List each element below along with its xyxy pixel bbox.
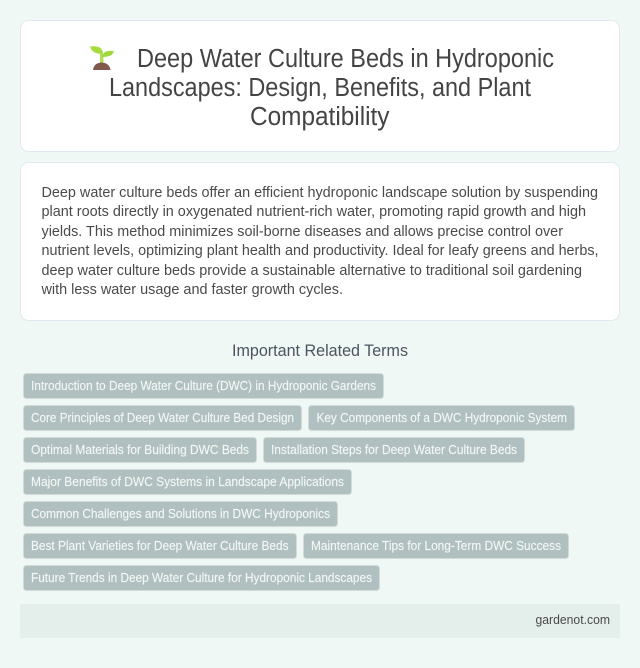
tag: installation steps bbox=[264, 438, 524, 462]
tag: maintenance tips bbox=[304, 534, 568, 558]
tag: major benefits: Major Benefits of DWC Systems in Landscape Applications bbox=[31, 474, 344, 489]
panel: title card bbox=[20, 20, 620, 152]
tag: future trends: Future Trends in Deep Water Culture for Hydroponic Landscapes bbox=[31, 570, 372, 585]
tag: maintenance tips: Maintenance Tips for Long-Term DWC Success bbox=[311, 538, 561, 553]
tag: major benefits bbox=[24, 470, 352, 494]
description text: with less water usage and faster growth cycles. bbox=[41, 282, 343, 298]
tag: future trends bbox=[24, 566, 380, 590]
footer bbox=[20, 604, 620, 638]
tag: installation steps: Installation Steps for Deep Water Culture Beds bbox=[271, 442, 517, 457]
title: Compatibility bbox=[250, 103, 390, 131]
tag: common challenges bbox=[24, 502, 338, 526]
description text bbox=[41, 185, 598, 298]
tag: core principles bbox=[24, 406, 302, 430]
tag: introduction: Introduction to Deep Water Culture (DWC) in Hydroponic Gardens bbox=[31, 378, 376, 393]
title: Landscapes: Design, Benefits, and Plant bbox=[109, 74, 531, 102]
tag: optimal materials: Optimal Materials for Building DWC Beds bbox=[31, 442, 249, 457]
tag: best plant varieties bbox=[24, 534, 296, 558]
tag: key components: Key Components of a DWC Hydroponic System bbox=[316, 410, 567, 425]
tag: introduction bbox=[24, 374, 384, 398]
panel: description card bbox=[20, 162, 620, 320]
tag: best plant varieties: Best Plant Varieties for Deep Water Culture Beds bbox=[31, 538, 288, 553]
description text: yields. This method minimizes soil-borne diseases and allows precise control over bbox=[42, 224, 563, 240]
footer: gardenot.com bbox=[536, 613, 610, 627]
description text: Deep water culture beds offer an efficient hydroponic landscape solution by suspending bbox=[42, 185, 598, 201]
tag: key components bbox=[308, 406, 574, 430]
title: Deep Water Culture Beds in Hydroponic bbox=[137, 45, 554, 73]
title bbox=[109, 45, 554, 131]
heading: related terms: Important Related Terms bbox=[232, 342, 408, 360]
description text: nutrient levels, optimizing plant health and productivity. Ideal for leafy greens and herbs, bbox=[42, 243, 598, 259]
description text: plant roots directly in oxygenated nutrient-rich water, promoting rapid growth and high bbox=[42, 204, 586, 220]
tag: common challenges: Common Challenges and Solutions in DWC Hydroponics bbox=[31, 506, 330, 521]
description text: deep water culture beds provide a sustainable alternative to traditional soil gardening bbox=[42, 263, 582, 279]
panel: related terms tags bbox=[24, 374, 574, 590]
icon: sprout bbox=[90, 46, 114, 70]
tag: core principles: Core Principles of Deep Water Culture Bed Design bbox=[31, 410, 294, 425]
tag: optimal materials bbox=[24, 438, 256, 462]
